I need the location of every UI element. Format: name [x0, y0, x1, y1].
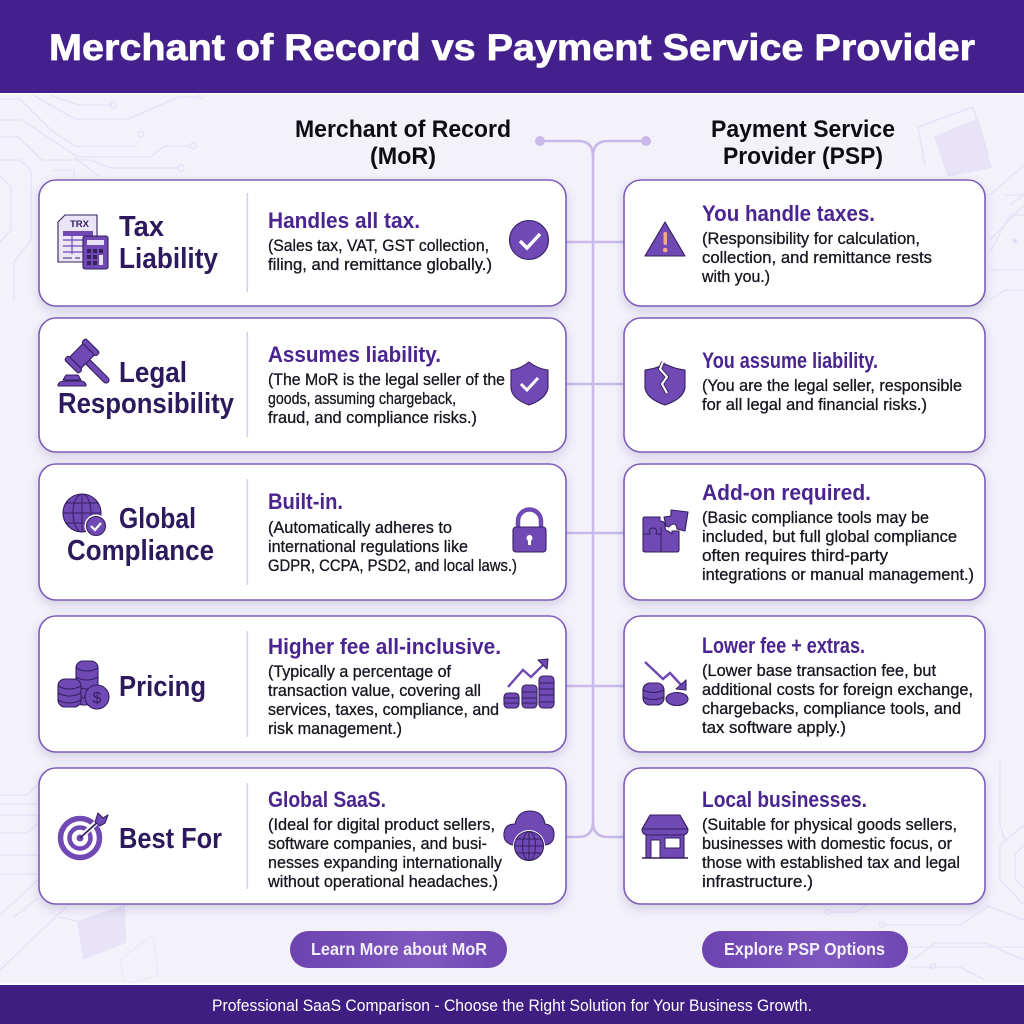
icon: warning triangle [645, 222, 685, 256]
panel: PSP global compliance [624, 464, 985, 600]
title: Merchant of Record vs Payment Service Provider [49, 27, 975, 68]
panel: PSP pricing [624, 616, 985, 752]
connector lines [535, 136, 651, 837]
description: (Sales tax, VAT, GST collection, [268, 236, 489, 255]
row label: Responsibility [58, 388, 234, 420]
row label [58, 357, 234, 420]
icon: globe with check badge [63, 494, 108, 538]
column heading: PSP: Payment Service [711, 116, 895, 143]
description: integrations or manual management.) [702, 565, 974, 584]
icon: coin stacks with dollar [58, 661, 109, 709]
icon: target with arrow [60, 813, 108, 858]
description: (Basic compliance tools may be [702, 508, 929, 527]
description: (Ideal for digital product sellers, [268, 815, 495, 834]
icon: falling coin chart [643, 662, 688, 706]
description [702, 348, 962, 414]
description: often requires third-party [702, 546, 888, 565]
description: fraud, and compliance risks.) [268, 408, 477, 427]
button: Learn More about MoR [290, 931, 507, 968]
row label: Best For [119, 823, 222, 855]
footer band [0, 984, 1024, 1024]
description: Lower fee + extras. [702, 633, 865, 658]
description [702, 633, 973, 737]
column heading: PSP [711, 116, 895, 170]
description [701, 201, 932, 286]
row label: Tax [119, 211, 164, 243]
description: (Typically a percentage of [268, 662, 451, 681]
description: transaction value, covering all [268, 681, 481, 700]
description: software companies, and busi- [268, 834, 487, 853]
icon: rising coin chart [504, 659, 554, 708]
column heading: MoR [295, 116, 511, 170]
description: tax software apply.) [702, 718, 846, 737]
panel: PSP tax liability [624, 180, 985, 306]
description: filing, and remittance globally.) [268, 255, 492, 274]
description [268, 634, 501, 738]
description: You handle taxes. [702, 201, 875, 226]
description: chargebacks, compliance tools, and [702, 699, 961, 718]
description [702, 480, 974, 584]
button: Explore PSP Options [702, 931, 908, 968]
description [268, 208, 492, 274]
row label: Pricing [119, 671, 206, 703]
description: businesses with domestic focus, or [702, 834, 952, 853]
row label [67, 503, 214, 567]
description: You assume liability. [702, 348, 878, 373]
description: GDPR, CCPA, PSD2, and local laws.) [268, 556, 517, 575]
panel: PSP legal responsibility [624, 318, 985, 452]
description: without operational headaches.) [267, 872, 498, 891]
description: Higher fee all-inclusive. [268, 634, 501, 659]
description [268, 342, 505, 427]
row label [119, 211, 218, 275]
description: (Responsibility for calculation, [702, 229, 920, 248]
description: those with established tax and legal [702, 853, 960, 872]
panel: MoR tax liability [39, 180, 566, 306]
description [702, 787, 960, 891]
description: (Suitable for physical goods sellers, [702, 815, 957, 834]
description: with you.) [701, 267, 770, 286]
panel: MoR best for [39, 768, 566, 904]
icon: broken shield [645, 362, 685, 405]
icon: shield with check [511, 362, 548, 405]
description: Handles all tax. [268, 208, 420, 233]
description: Global SaaS. [268, 787, 386, 812]
description: goods, assuming chargeback, [268, 389, 456, 408]
description [267, 787, 502, 891]
icon: storefront [642, 815, 688, 858]
description: included, but full global compliance [702, 527, 957, 546]
description: Add-on required. [702, 480, 871, 505]
icon: check circle [510, 220, 548, 260]
panel: MoR legal responsibility [39, 318, 566, 452]
row label: Legal [119, 357, 187, 389]
description: collection, and remittance rests [702, 248, 932, 267]
description: nesses expanding internationally [268, 853, 502, 872]
column heading: MoR: Merchant of Record [295, 116, 511, 143]
description: international regulations like [268, 537, 468, 556]
icon: tax form and calculator: TRX [70, 219, 90, 230]
description: (The MoR is the legal seller of the [268, 370, 505, 389]
description: risk management.) [268, 719, 402, 738]
description: Assumes liability. [268, 342, 441, 367]
description: Local businesses. [702, 787, 867, 812]
button: Explore PSP Options: Explore PSP Options [724, 939, 885, 959]
panel: PSP best for [624, 768, 985, 904]
icon: puzzle pieces [643, 510, 688, 552]
icon: tax form and calculator [58, 215, 108, 269]
icon: padlock [513, 510, 546, 552]
button: Learn More about MoR: Learn More about MoR [311, 939, 487, 959]
row label: Compliance [67, 535, 214, 567]
row label: Liability [119, 243, 218, 275]
description [268, 489, 517, 575]
description: services, taxes, compliance, and [268, 700, 499, 719]
panel: MoR pricing [39, 616, 566, 752]
description: for all legal and financial risks.) [702, 395, 927, 414]
footer text: Professional SaaS Comparison - Choose the Right Solution for Your Business Growth. [212, 997, 812, 1015]
icon: gavel [58, 338, 119, 393]
row label: Global [119, 503, 196, 535]
column heading: PSP: Provider (PSP) [723, 143, 883, 170]
header band [0, 0, 1024, 94]
description: (Automatically adheres to [268, 518, 452, 537]
description: Built-in. [268, 489, 343, 514]
icon: coin stacks with dollar: $ [93, 690, 102, 707]
description: (Lower base transaction fee, but [702, 661, 936, 680]
description: infrastructure.) [702, 872, 813, 891]
description: (You are the legal seller, responsible [702, 376, 962, 395]
panel: MoR global compliance [39, 464, 566, 600]
column heading: MoR: (MoR) [370, 143, 436, 170]
description: additional costs for foreign exchange, [702, 680, 973, 699]
icon: cloud with globe [504, 811, 554, 862]
